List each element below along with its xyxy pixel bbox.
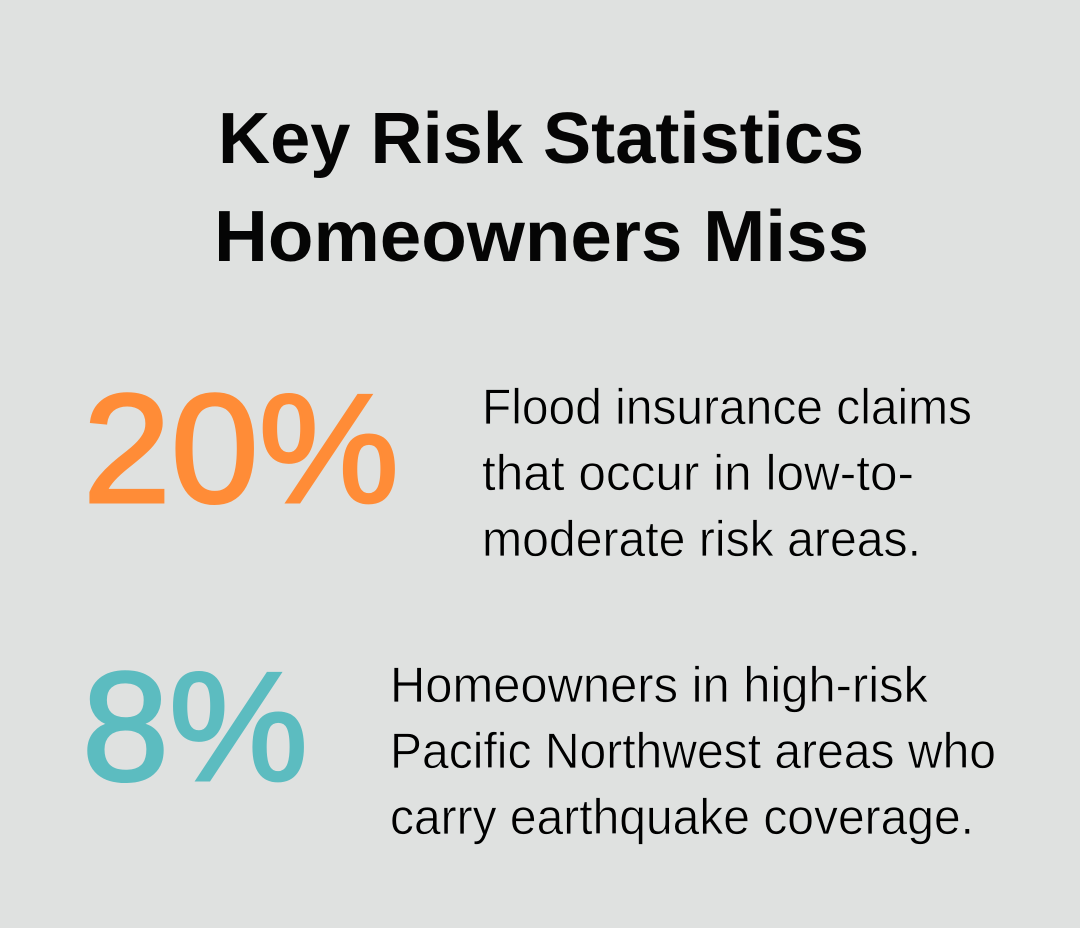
statistic: 8 percent: 8% [82, 640, 308, 813]
title: Homeowners Miss [214, 197, 869, 277]
description: earthquake coverage [390, 657, 996, 845]
title [214, 99, 869, 277]
description: flood insurance claims: moderate risk areas. [482, 511, 921, 567]
title: Key Risk Statistics [218, 99, 864, 179]
description: flood insurance claims: that occur in low-to- [482, 445, 914, 501]
description: flood insurance claims: Flood insurance claims [482, 379, 972, 435]
description: earthquake coverage: Pacific Northwest areas who [390, 723, 996, 779]
description: earthquake coverage: Homeowners in high-risk [390, 657, 929, 713]
description: flood insurance claims [482, 379, 972, 567]
statistic: 20 percent: 20% [83, 362, 399, 535]
description: earthquake coverage: carry earthquake coverage. [390, 789, 974, 845]
